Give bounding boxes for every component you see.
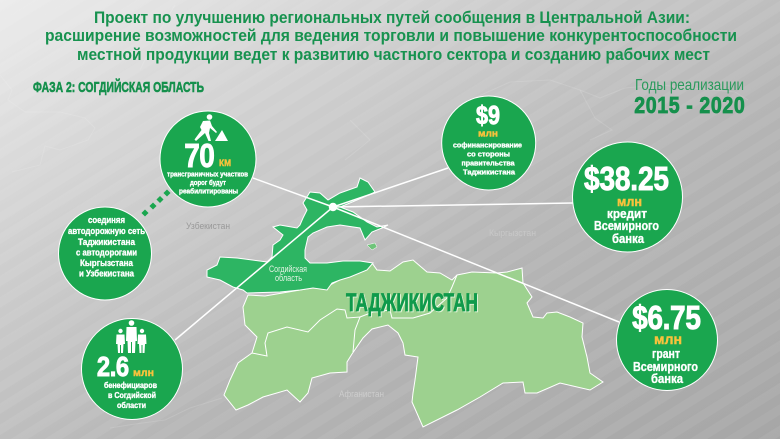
country labels <box>186 221 536 399</box>
circle: 2.6 million beneficiaries: в Согдийской <box>108 391 156 400</box>
circle: 38.25 million credit: Всемирного <box>594 218 659 233</box>
title: Проект по улучшению региональных путей сообщения в Центральной Азии: <box>94 9 690 27</box>
circle: road network: и Узбекистана <box>79 269 135 280</box>
circle: 9 million co-financing: Таджикистана <box>463 168 516 177</box>
dotted connector <box>141 189 171 217</box>
circle: road network: соединяя <box>88 215 125 226</box>
title <box>45 9 737 64</box>
connector lines <box>175 168 619 340</box>
country name <box>346 289 479 318</box>
region name: область <box>275 273 302 283</box>
circle: 70 km: трансграничных участков <box>167 170 248 178</box>
circle: 6.75 million grant: млн <box>654 331 682 347</box>
circle: road network: с автодорогами <box>76 248 137 259</box>
circle: 38.25 million credit: банка <box>612 231 645 246</box>
title: расширение возможностей для ведения торговли и повышение конкурентоспособности <box>45 27 737 45</box>
circle: 6.75 million grant <box>616 290 718 390</box>
circle: 70 km: КМ <box>219 158 231 168</box>
circle: 9 million co-financing: правительства <box>462 159 515 168</box>
circle: 6.75 million grant: грант <box>652 346 680 361</box>
circle: 9 million co-financing: млн <box>478 129 498 139</box>
country name: ТАДЖИКИСТАН <box>347 290 479 318</box>
circle: 9 million co-financing: $9 <box>476 100 500 130</box>
circle: 2.6 million beneficiaries: бенефициаров <box>104 381 157 390</box>
circle: road network <box>58 207 152 300</box>
circle: 6.75 million grant: $6.75 <box>632 300 701 337</box>
circle: 2.6 million beneficiaries: 2.6 <box>97 350 129 382</box>
circle: 70 km <box>160 111 256 207</box>
circle: 70 km: реабилитированы <box>179 187 238 196</box>
circle: road network: Кыргызстана <box>80 258 134 269</box>
implementation years <box>634 77 745 118</box>
circle: 9 million co-financing: софинансирование <box>453 141 522 150</box>
icon: family <box>116 320 146 353</box>
region name <box>269 264 307 283</box>
circle: 2.6 million beneficiaries <box>82 318 182 420</box>
circle: 70 km: 70 <box>184 138 215 175</box>
circle: road network: автодорожную сеть <box>68 226 145 237</box>
country name: ТАДЖИКИСТАН <box>346 289 478 317</box>
circle: 2.6 million beneficiaries: млн <box>133 368 154 379</box>
circle: 6.75 million grant: Всемирного <box>633 359 698 374</box>
country labels: Узбекистан <box>186 221 230 231</box>
implementation years: 2015 - 2020 <box>634 93 745 118</box>
circle: 38.25 million credit: кредит <box>607 206 647 221</box>
circle: 9 million co-financing: со стороны <box>467 150 510 159</box>
map: Tajikistan <box>224 260 603 427</box>
circle: 38.25 million credit: млн <box>617 194 642 209</box>
phase heading: ФАЗА 2: СОГДИЙСКАЯ ОБЛАСТЬ <box>33 78 204 96</box>
enclave <box>367 243 377 250</box>
circle: 9 million co-financing <box>442 96 536 190</box>
country labels: Кыргызстан <box>489 228 536 238</box>
implementation years: Годы реализации <box>635 77 744 94</box>
map: internal regional borders <box>252 275 457 356</box>
circle: 38.25 million credit <box>572 142 682 252</box>
circle: 38.25 million credit: $38.25 <box>584 161 669 198</box>
map: Sughd region <box>207 178 388 293</box>
circle: road network: Таджикистана <box>78 237 136 248</box>
country labels: Афганистан <box>339 389 384 399</box>
title: местной продукции ведет к развитию частного сектора и созданию рабочих мест <box>77 46 710 64</box>
region name: Согдийская <box>269 264 307 274</box>
circle: 6.75 million grant: банка <box>651 371 684 386</box>
circle: 2.6 million beneficiaries: области <box>117 401 146 410</box>
circle: 70 km: дорог будут <box>190 178 226 187</box>
icon: road worker <box>194 114 228 141</box>
